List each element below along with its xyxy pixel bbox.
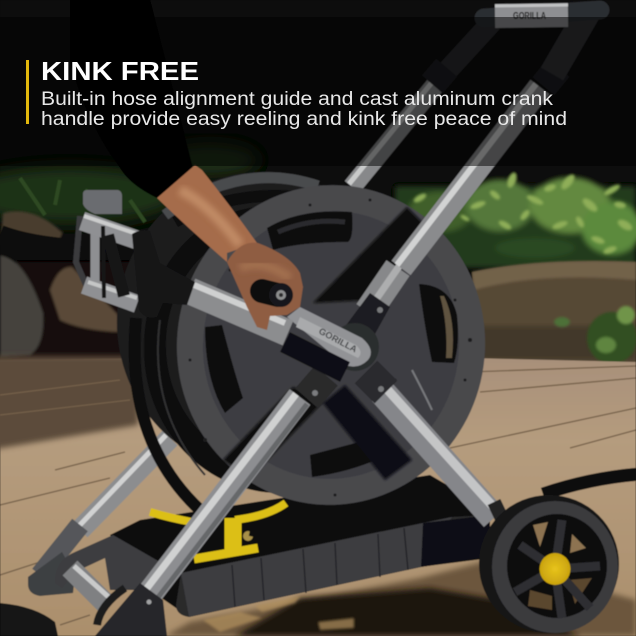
rear reel flange <box>117 172 407 472</box>
forearm <box>157 165 257 262</box>
flange inner face <box>186 194 476 496</box>
crank handle tube <box>190 285 345 372</box>
description: Built-in hose alignment guide and cast aluminum crank <box>41 89 554 110</box>
shadow upper spoke <box>313 207 427 303</box>
lower right tube <box>366 372 505 525</box>
front foot bracket <box>95 583 167 636</box>
dark hollow of base <box>110 475 490 617</box>
front reel flange <box>156 165 506 525</box>
description: handle provide easy reeling and kink free peace of mind <box>41 109 567 130</box>
paving <box>0 356 636 636</box>
base front wall <box>176 515 490 617</box>
yellow hub <box>540 553 570 585</box>
rail lower <box>84 285 137 304</box>
text backdrop band <box>0 17 636 166</box>
black sleeve <box>132 230 195 318</box>
crank arm with brand: GORILLA <box>317 326 359 355</box>
coiled hose <box>155 217 385 473</box>
slot top <box>267 211 352 250</box>
slot left <box>205 325 243 413</box>
crank arm with brand <box>287 307 371 367</box>
rocks <box>0 211 180 360</box>
wheel <box>479 495 619 633</box>
left handle assembly <box>76 190 195 318</box>
hand <box>227 243 303 330</box>
middle connector <box>90 232 100 285</box>
wet ground under cart <box>165 560 636 636</box>
lower left tube <box>95 377 328 636</box>
brand on handle: GORILLA <box>513 11 546 22</box>
rear upper tube <box>349 22 492 187</box>
accent bar <box>26 60 29 124</box>
main frame tube upper <box>368 12 588 312</box>
arm and hand <box>70 0 303 330</box>
slot bottom <box>310 436 385 477</box>
slot right <box>419 284 458 363</box>
black shirt sleeve <box>70 0 193 198</box>
shadow pattern on ground <box>203 596 354 632</box>
crank hub <box>331 293 390 371</box>
boot <box>0 603 58 636</box>
black hose on base <box>250 490 430 535</box>
rail upper <box>82 221 137 240</box>
foliage: left <box>0 142 260 225</box>
rear lower tube <box>40 435 170 575</box>
title: KINK FREE <box>41 56 199 86</box>
foliage: right <box>395 177 636 268</box>
side bracket <box>76 216 86 285</box>
cart shadow <box>235 588 580 636</box>
left foot <box>28 552 75 596</box>
top handle <box>484 5 600 22</box>
knob <box>262 291 278 295</box>
hose coils <box>0 172 408 510</box>
base loop handle <box>55 535 160 590</box>
retaining wall <box>472 261 636 362</box>
black grip <box>552 12 588 74</box>
garden hose in background <box>543 474 636 494</box>
hanging hose loop <box>135 318 200 510</box>
collar <box>540 68 562 86</box>
yellow nozzle <box>150 503 286 559</box>
foliage: lower right shrub <box>554 306 636 364</box>
foliage: leaves <box>412 171 634 255</box>
water droplets <box>188 198 472 496</box>
spoke openings <box>533 522 586 553</box>
description <box>41 89 567 130</box>
base handle bar <box>70 568 108 606</box>
top knob <box>83 190 122 214</box>
hose to the left <box>0 235 110 250</box>
shadow lower spoke <box>223 387 325 478</box>
base cart <box>28 475 490 617</box>
